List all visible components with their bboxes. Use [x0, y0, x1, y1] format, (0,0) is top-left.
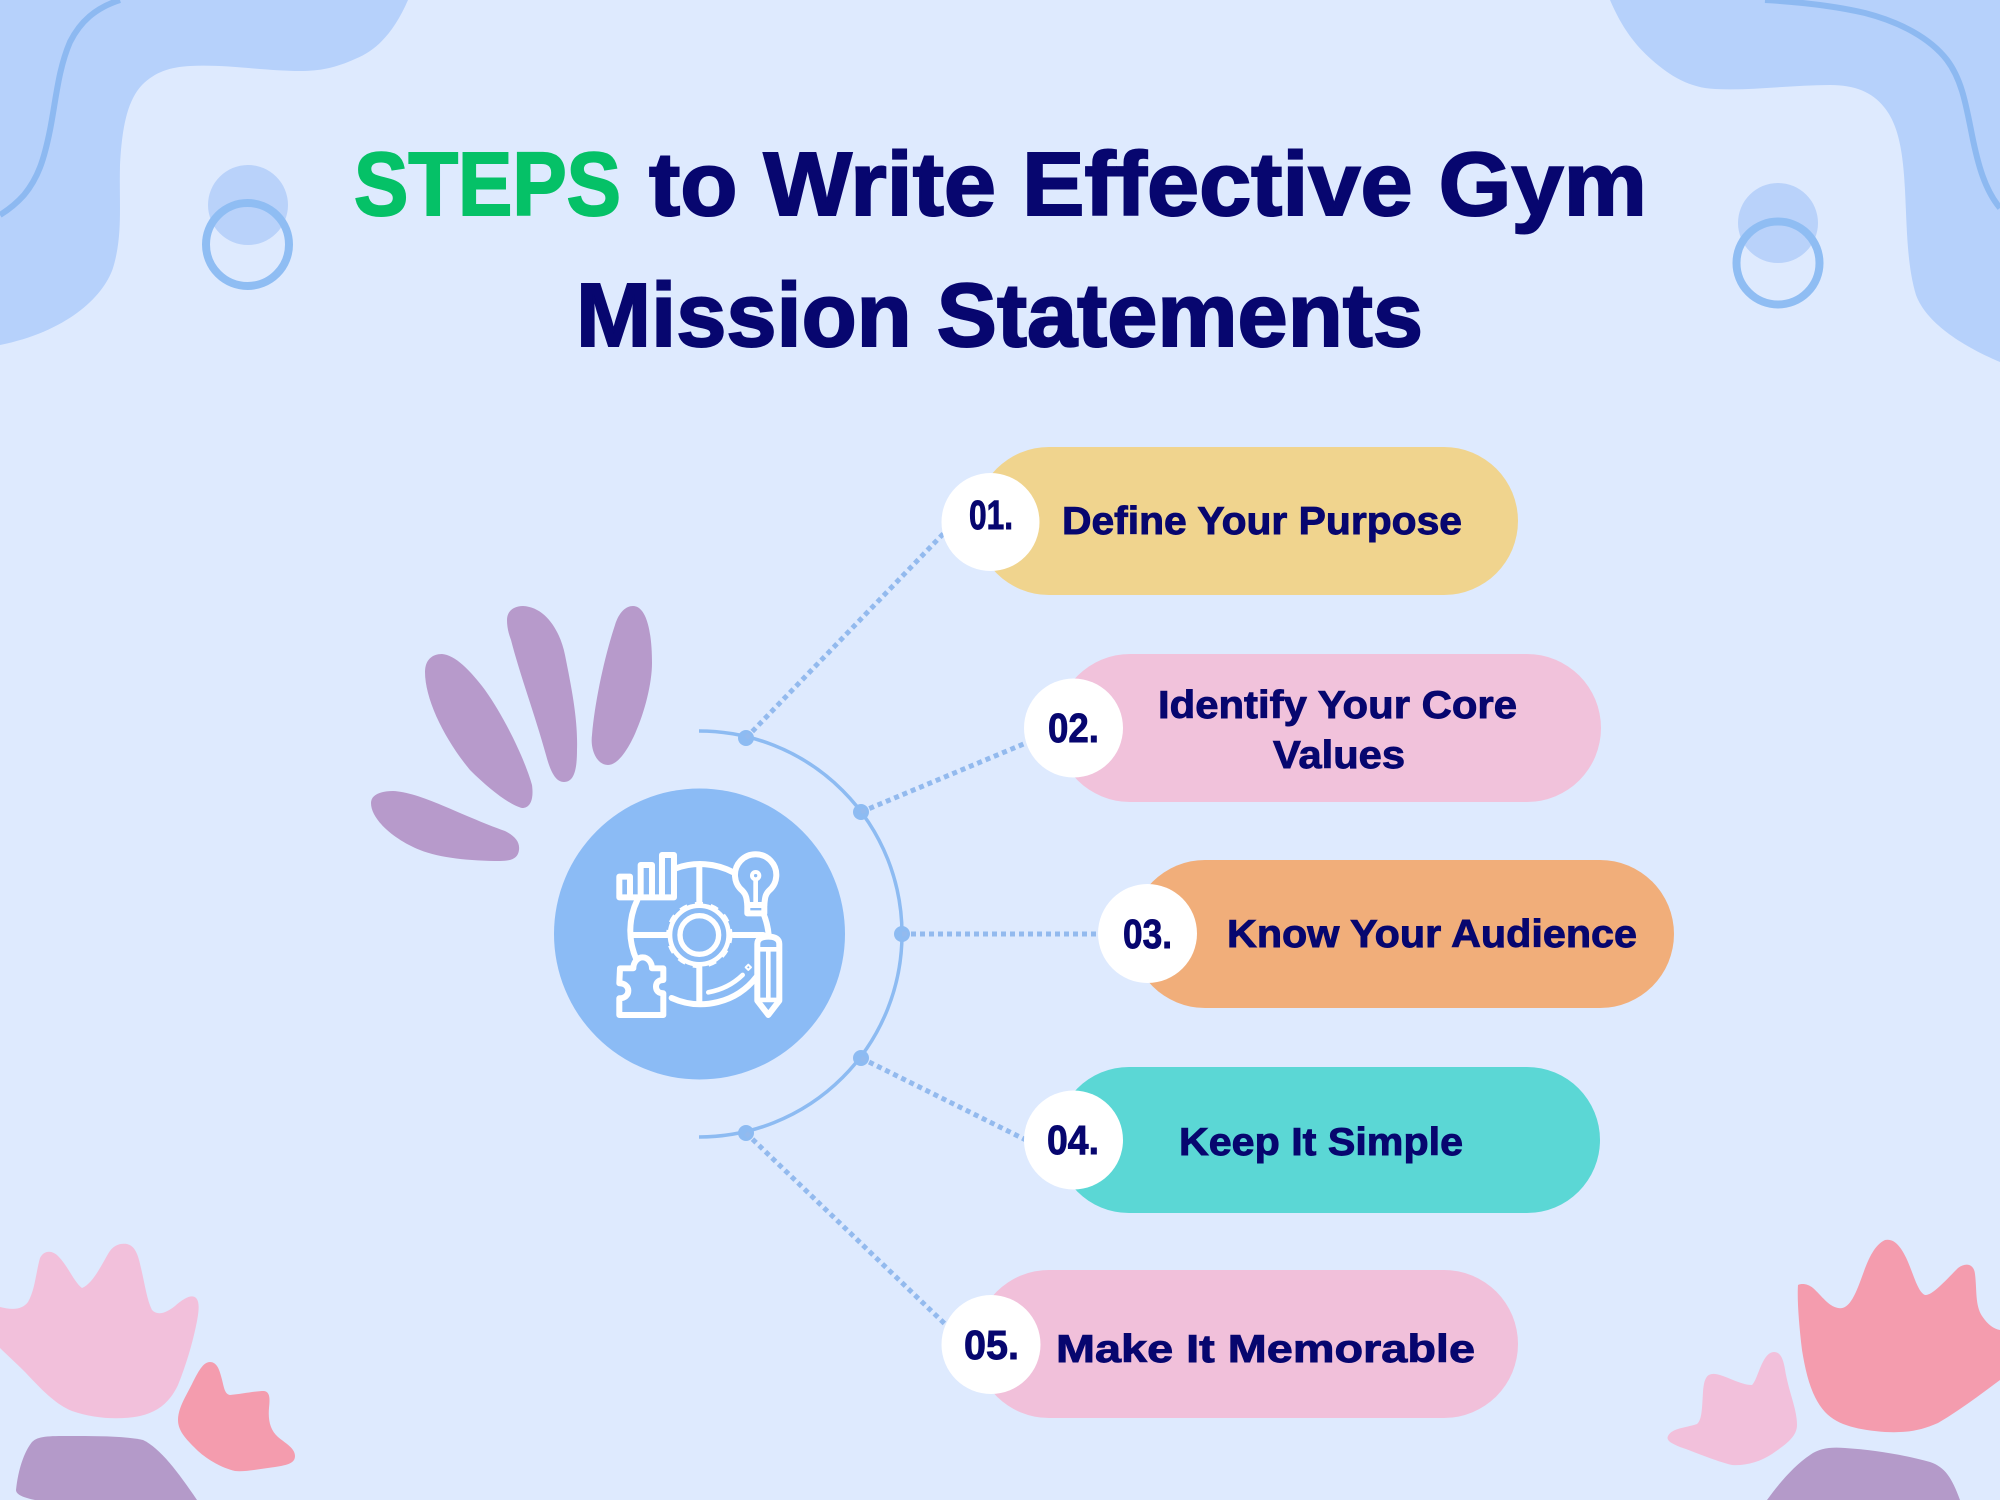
step 05: 05.: [964, 1322, 1019, 1368]
step 05: Make It Memorable: [1056, 1328, 1475, 1371]
title: to Write Effective Gym: [649, 135, 1647, 235]
step 02: 02.: [1048, 705, 1099, 751]
step 01: [942, 447, 1518, 595]
icon: strategy gear, chart, bulb, puzzle, pencil: [619, 854, 779, 1015]
central circle: [554, 788, 845, 1080]
step 02: Identify Your Core: [1158, 684, 1517, 727]
decorative circle and ring: top right: [1736, 183, 1820, 304]
decorative petals: [371, 606, 652, 861]
decorative blob: top left: [0, 0, 408, 345]
step 03: [1098, 860, 1674, 1008]
step 01: Define Your Purpose: [1062, 500, 1462, 543]
decorative flowers: bottom right: [1668, 1240, 2000, 1500]
title: Mission Statements: [576, 266, 1423, 366]
step 04: 04.: [1047, 1117, 1099, 1163]
dotted connectors: [746, 533, 1098, 1325]
step 02: [1024, 654, 1601, 802]
step 01: 01.: [969, 492, 1013, 538]
connector arc with nodes: [699, 730, 910, 1141]
step 04: Keep It Simple: [1179, 1121, 1463, 1164]
title: STEPS: [354, 135, 621, 235]
step 03: 03.: [1123, 911, 1172, 957]
step 02: Values: [1273, 734, 1405, 777]
step 04: [1024, 1067, 1600, 1213]
decorative flowers: bottom left: [0, 1244, 295, 1500]
decorative circle and ring: top left: [206, 165, 289, 286]
title: [354, 135, 1647, 366]
decorative blob: top right: [1610, 0, 2000, 362]
step 05: [942, 1270, 1518, 1418]
step 03: Know Your Audience: [1227, 913, 1637, 956]
